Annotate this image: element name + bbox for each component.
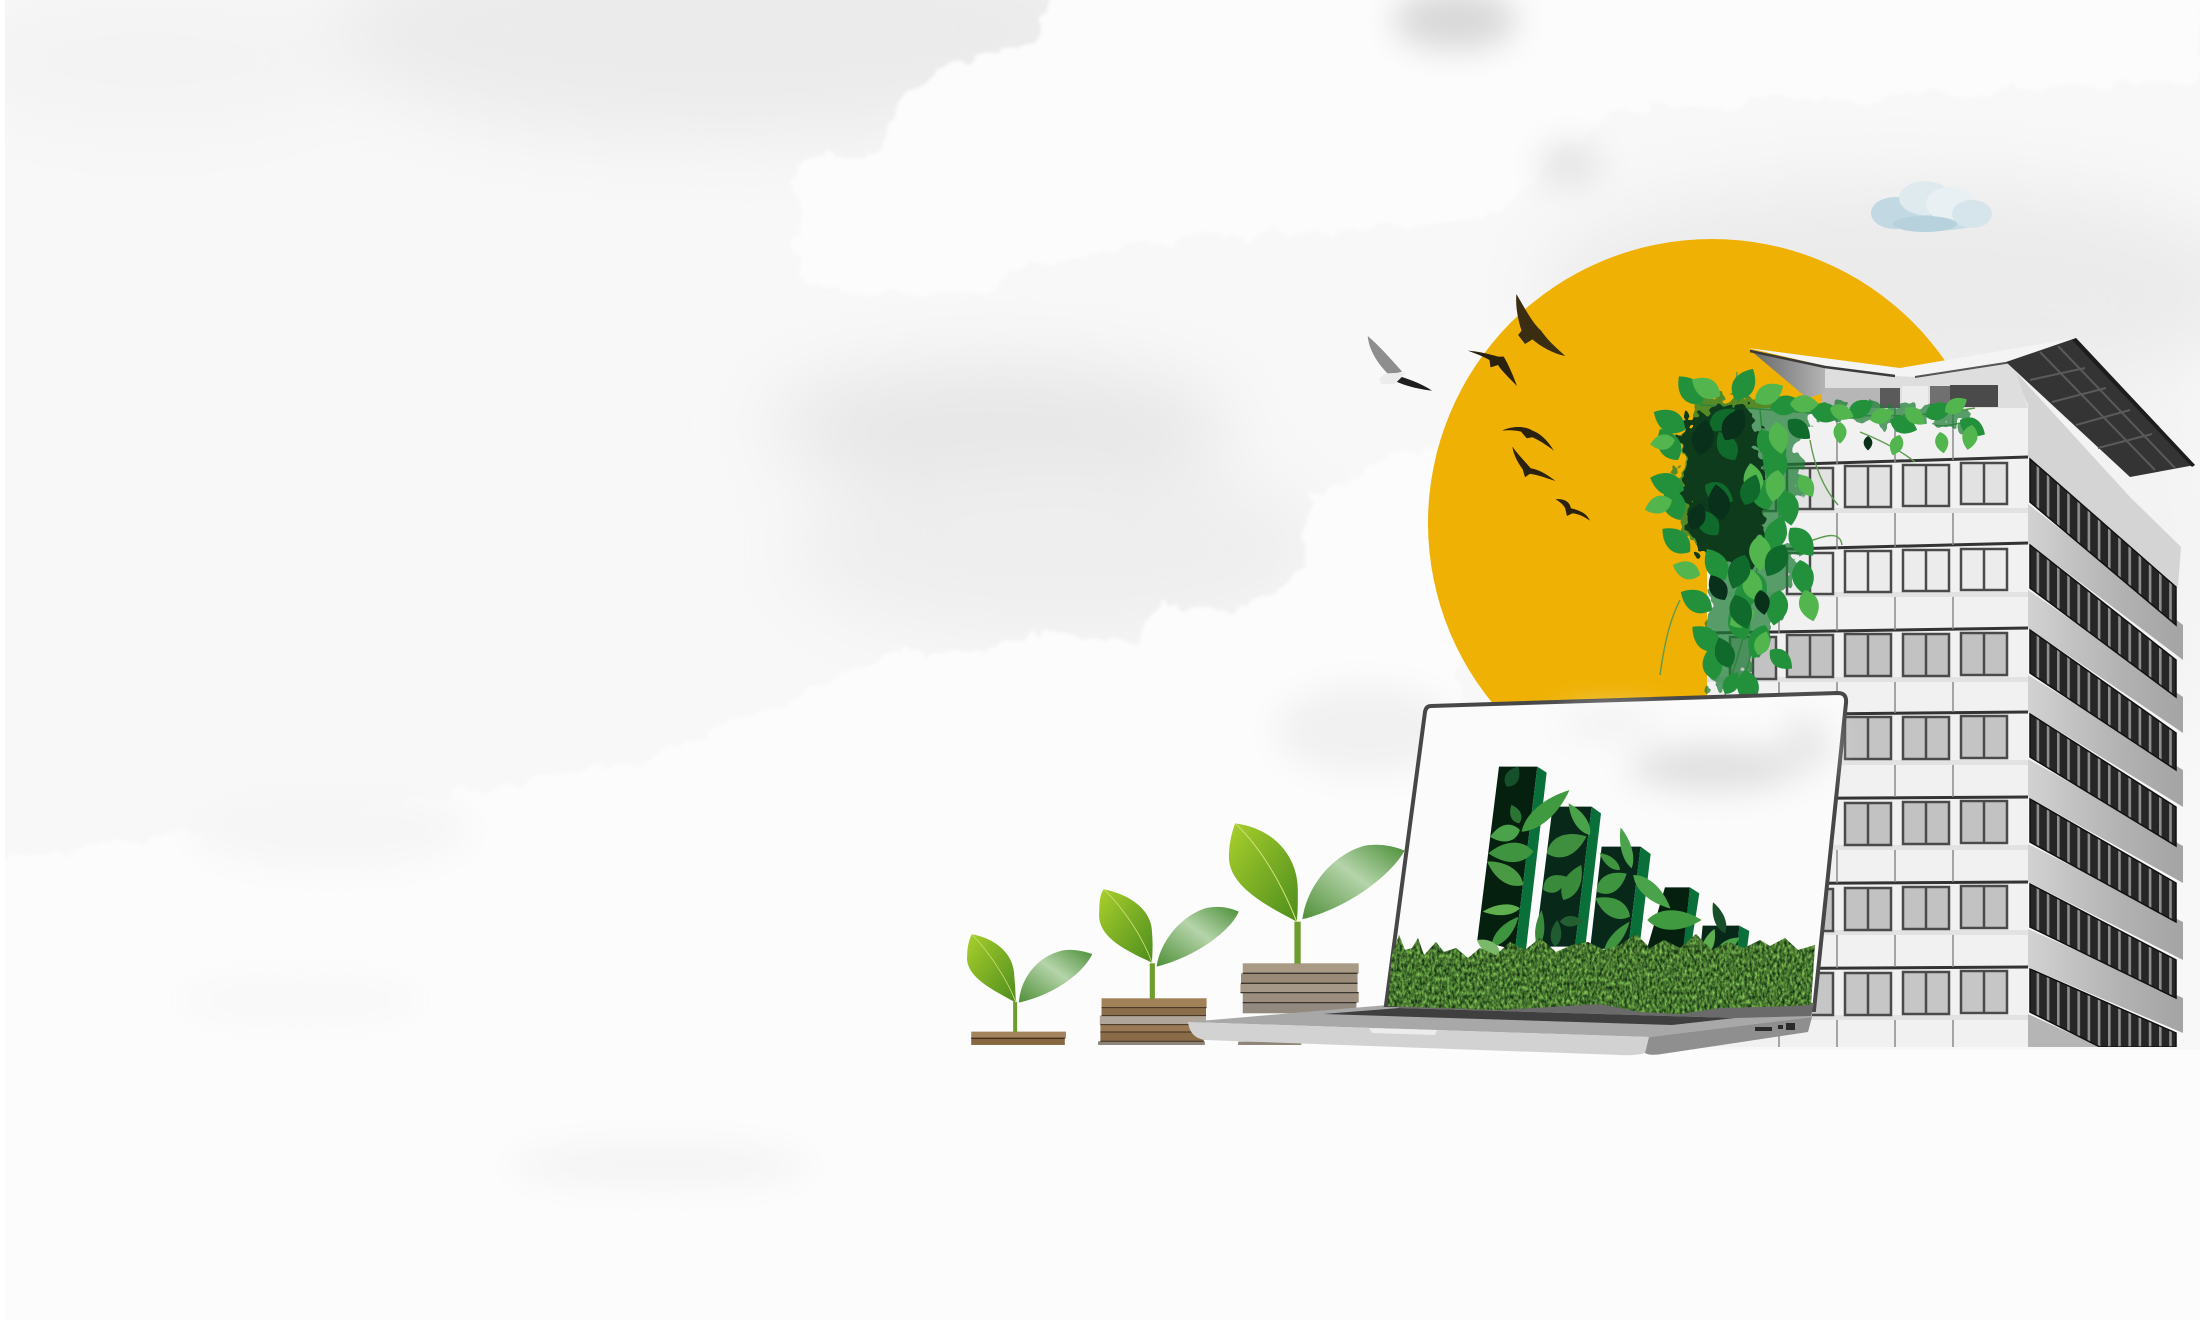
leaf: [1302, 845, 1405, 919]
seedlings and coins: [967, 823, 1405, 1045]
laptop: screen: [1386, 693, 1846, 1010]
bird: upper flock 1: [1516, 294, 1565, 356]
plant 2 with coins: [1098, 889, 1239, 1045]
small blue cloud: [1871, 181, 1992, 232]
building: [1707, 338, 2195, 1047]
vine: dark foliage core: [1681, 406, 1765, 569]
bird: flock 5: [1555, 499, 1590, 521]
vine: near-black leaves: [1684, 403, 1872, 616]
illustration: sustainable growth collage: [5, 0, 2200, 1056]
bar 2: [1535, 807, 1601, 958]
plant 3 with coins: [1229, 823, 1405, 1045]
bird: upper flock 2: [1468, 351, 1517, 386]
bar 1: [1477, 767, 1547, 958]
leaf: [1019, 950, 1092, 1003]
building: roof: [1748, 338, 2195, 477]
sun circle: [1428, 239, 1996, 807]
vine: mid leaves: [1646, 363, 1989, 707]
plant 1 with coins: [967, 934, 1092, 1045]
laptop: leafy bar chart: [1474, 763, 1749, 959]
laptop: base: [1188, 1004, 1812, 1055]
chart: leaves: [1474, 763, 1742, 959]
climbing vine: [1642, 363, 1989, 707]
bird: flock 4: [1512, 447, 1555, 481]
building: side floors: [2028, 459, 2183, 1047]
building: front facade: [1707, 408, 1996, 776]
bird: flock 3: [1502, 427, 1554, 451]
laptop: clouds on screen: [1560, 713, 1831, 790]
coin stack 1: [971, 1032, 1066, 1045]
vine: dark green leaves: [1690, 402, 1816, 671]
leaf: [967, 934, 1016, 1003]
vine: tendrils and stems: [1660, 372, 1975, 695]
bar 5: [1700, 926, 1749, 953]
leaf: [1229, 823, 1298, 922]
birds: [1368, 294, 1590, 521]
bar 3: [1590, 847, 1651, 957]
leaf: [1157, 907, 1239, 967]
vine: bright leaves: [1642, 371, 1979, 658]
vine: mid foliage silhouette: [1677, 396, 1972, 690]
building: side upper wall: [2012, 368, 2181, 587]
bar 4: [1647, 887, 1699, 953]
laptop: screen bottom strip: [1392, 1003, 1814, 1018]
building: penthouse: [1822, 364, 2028, 408]
leaf: [1099, 889, 1153, 963]
laptop: [1188, 693, 1846, 1055]
laptop: grass: [1388, 934, 1815, 1014]
building: front floor lines, joints and windows: [1707, 408, 2028, 1047]
coin stack 3: [1238, 963, 1359, 1045]
bird: white gull: [1368, 336, 1432, 391]
coin stack 2: [1098, 998, 1207, 1045]
